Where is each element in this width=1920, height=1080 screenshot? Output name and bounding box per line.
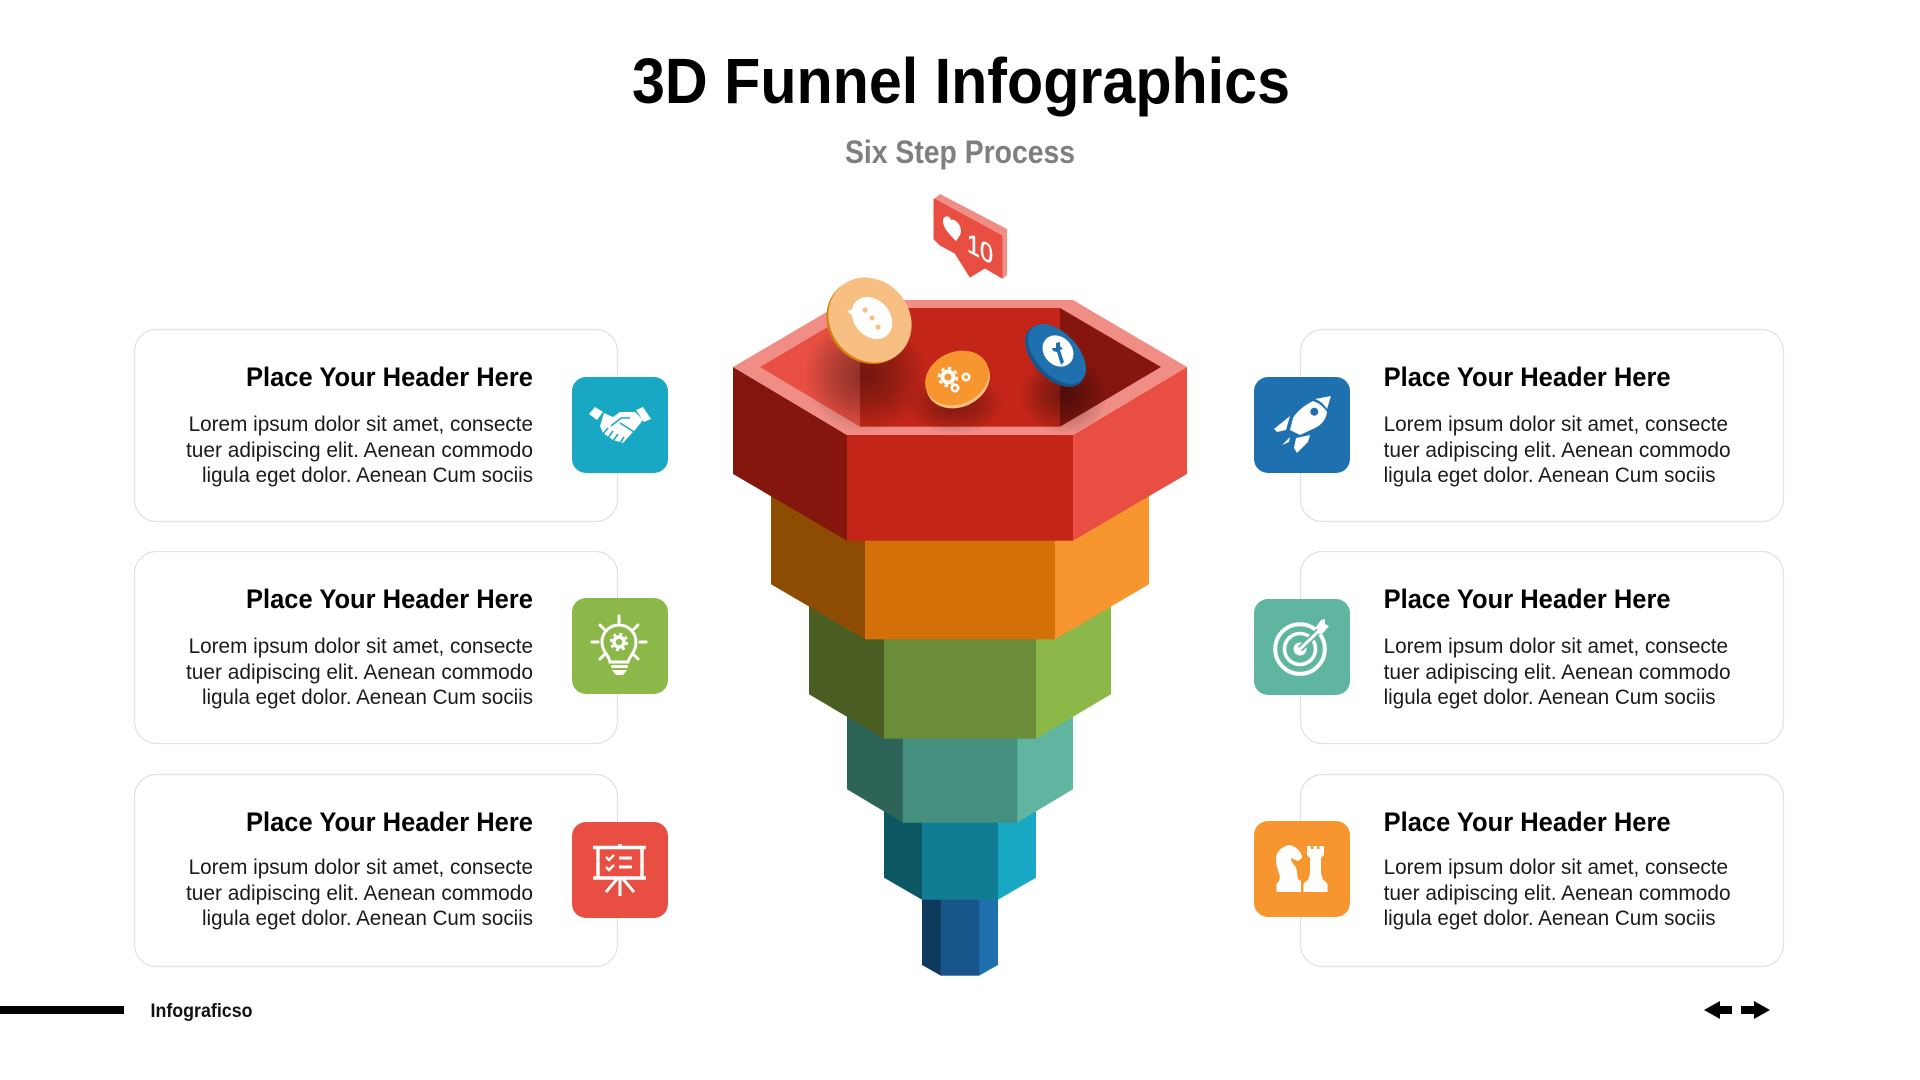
- card: left middle: ligula eget dolor. Aenean Cum sociis: [202, 686, 533, 709]
- funnel shadows: [808, 334, 1104, 432]
- icon: chess pieces: [1254, 821, 1350, 917]
- footer bar: [0, 1006, 124, 1014]
- funnel layer 4: teal: [847, 705, 1073, 823]
- card: right middle: Lorem ipsum dolor sit amet, consecte: [1384, 635, 1728, 658]
- funnel: [733, 300, 1187, 976]
- card: right middle: Place Your Header Here: [1384, 584, 1671, 614]
- card: left bottom: [134, 774, 618, 966]
- card: right bottom: tuer adipiscing elit. Aenean commodo: [1384, 882, 1731, 905]
- card: left bottom: tuer adipiscing elit. Aenean commodo: [186, 882, 533, 905]
- card: left middle: Place Your Header Here: [246, 584, 533, 614]
- card: left middle: tuer adipiscing elit. Aenean commodo: [186, 661, 533, 684]
- icon: presentation board: [572, 822, 668, 918]
- card: left top: tuer adipiscing elit. Aenean commodo: [186, 439, 533, 462]
- funnel layer 6: blue: [922, 890, 998, 976]
- icon: target: [1254, 599, 1350, 695]
- card: left bottom: Place Your Header Here: [246, 807, 533, 837]
- card: right top: ligula eget dolor. Aenean Cum sociis: [1384, 464, 1716, 487]
- card: left middle: Lorem ipsum dolor sit amet, consecte: [189, 635, 533, 658]
- card: left top: Place Your Header Here: [246, 362, 533, 392]
- like badge: 10: [967, 228, 993, 271]
- card: left top: Lorem ipsum dolor sit amet, consecte: [189, 413, 533, 436]
- card: right top: tuer adipiscing elit. Aenean commodo: [1384, 439, 1731, 462]
- card: right bottom: ligula eget dolor. Aenean Cum sociis: [1384, 907, 1716, 930]
- subtitle: Six Step Process: [845, 134, 1075, 170]
- card: right top: Lorem ipsum dolor sit amet, consecte: [1384, 413, 1728, 436]
- card: right bottom: Lorem ipsum dolor sit amet, consecte: [1384, 856, 1728, 879]
- card: right top: Place Your Header Here: [1384, 362, 1671, 392]
- card: right top: [1300, 330, 1784, 522]
- funnel layer 5: cyan: [884, 800, 1036, 900]
- icon: rocket: [1254, 377, 1350, 473]
- card: left middle: [134, 552, 618, 744]
- arrow: next: [1741, 1001, 1770, 1019]
- card: left bottom: Lorem ipsum dolor sit amet, consecte: [189, 856, 533, 879]
- funnel layer 2: orange: [771, 470, 1149, 639]
- arrow: previous: [1704, 1001, 1732, 1019]
- footer brand: Infograficso: [150, 1001, 252, 1022]
- coin: chat: [809, 261, 929, 381]
- coin: gears: [916, 340, 999, 419]
- card: right middle: tuer adipiscing elit. Aenean commodo: [1384, 661, 1731, 684]
- like badge: [934, 194, 1007, 279]
- card: left top: [134, 330, 618, 522]
- title: 3D Funnel Infographics: [632, 45, 1290, 117]
- coin: facebook: [1014, 313, 1097, 398]
- card: left top: ligula eget dolor. Aenean Cum sociis: [202, 464, 533, 487]
- icon: handshake: [572, 377, 668, 473]
- card: right bottom: Place Your Header Here: [1384, 807, 1671, 837]
- icon: light bulb: [572, 598, 668, 694]
- card: right middle: [1300, 552, 1784, 744]
- funnel layer 1: red: [733, 300, 1187, 541]
- card: right middle: ligula eget dolor. Aenean Cum sociis: [1384, 686, 1716, 709]
- card: left bottom: ligula eget dolor. Aenean Cum sociis: [202, 907, 533, 930]
- card: right bottom: [1300, 774, 1784, 966]
- funnel layer 3: green: [809, 600, 1111, 739]
